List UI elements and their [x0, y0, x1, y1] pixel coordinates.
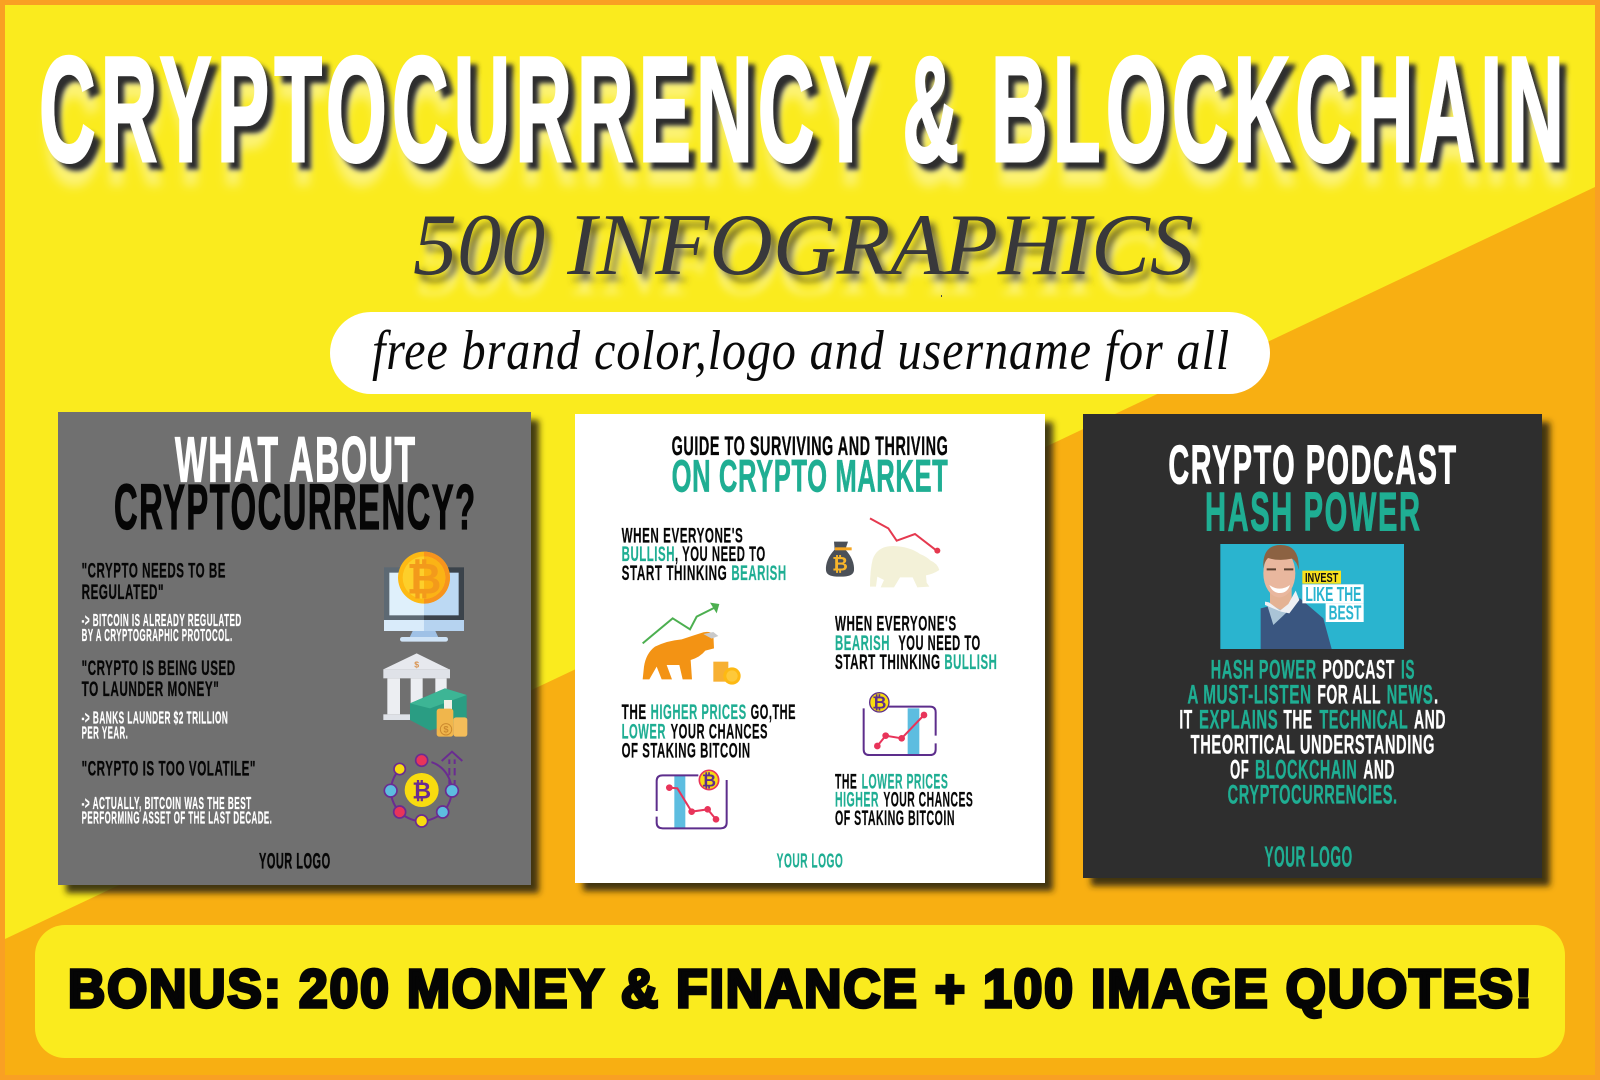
pill: free brand color	[330, 312, 1270, 394]
panel: guide to surviving: YOUR CHANCES	[883, 787, 973, 812]
text: podcast description: EXPLAINS	[1199, 704, 1278, 734]
text: lower prices: OF STAKING BITCOIN	[835, 805, 955, 830]
text: higher prices: THE	[622, 699, 647, 724]
image: podcast cover: INVEST	[1305, 570, 1338, 585]
text: lower prices: LOWER PRICES	[862, 769, 948, 794]
text: podcast description: HASH POWER	[1211, 654, 1317, 684]
text: regulated claim: "CRYPTO NEEDS TO BE	[82, 557, 226, 582]
text: podcast description: AND	[1363, 754, 1395, 784]
text: bearish advice: YOU NEED TO	[898, 630, 981, 655]
text: higher prices: LOWER	[622, 718, 666, 743]
text: bullish advice	[622, 522, 787, 585]
text: bullish advice: , YOU NEED TO	[675, 541, 766, 566]
heading: crypto podcast hash power	[1168, 433, 1458, 543]
text: lower prices: THE	[835, 769, 857, 794]
text: podcast description: IT	[1179, 704, 1193, 734]
icon: bear	[870, 546, 939, 587]
icon: rising chart	[864, 693, 936, 755]
text: lower prices: HIGHER	[835, 787, 879, 812]
icon: computer with bitcoin	[384, 552, 464, 642]
text: bearish advice	[835, 611, 997, 674]
text: podcast description: BLOCKCHAIN	[1255, 754, 1357, 784]
icon: falling line	[870, 518, 940, 554]
text: lower prices	[835, 769, 973, 830]
text: bearish advice: START THINKING	[835, 649, 941, 674]
text: bearish advice: WHEN EVERYONE'S	[835, 611, 957, 636]
text: laundering claim	[82, 655, 236, 742]
text: volatility claim: "CRYPTO IS TOO VOLATILE"	[82, 756, 256, 781]
text: higher prices: GO,THE	[751, 699, 796, 724]
banner: bonus: BONUS: 200 MONEY & FINANCE + 100 IMAGE QUOTES!	[68, 959, 1534, 1019]
text: podcast description: .	[1434, 679, 1439, 709]
heading: what about cryptocurrency	[114, 424, 477, 543]
banner: bonus	[35, 925, 1565, 1058]
text: podcast description: A MUST-LISTEN	[1187, 679, 1312, 709]
subtitle: 500 INFOGRAPHICS	[413, 197, 1194, 294]
image: podcast cover: BEST	[1329, 602, 1362, 625]
text: laundering claim: "CRYPTO IS BEING USED	[82, 655, 236, 680]
icon: falling chart: ₿	[702, 770, 716, 790]
text: podcast description: NEWS	[1387, 679, 1433, 709]
text: volatility claim: -> ACTUALLY, BITCOIN WAS THE BEST	[82, 793, 252, 813]
text: podcast description: OF	[1230, 754, 1249, 784]
panel: what about cryptocurrency: PERFORMING ASSET OF THE LAST DECADE.	[82, 807, 272, 827]
icon: bank with money: $	[414, 659, 419, 669]
icon: bank with money	[383, 653, 467, 737]
icon: money bag: ₿	[832, 555, 848, 576]
panel: what about cryptocurrency	[58, 412, 531, 885]
panel: what about cryptocurrency: -> BANKS LAUNDER $2 TRILLION	[82, 707, 228, 727]
text: bullish advice: BULLISH	[622, 541, 675, 566]
text: higher prices	[622, 699, 796, 763]
icon: rising chart: ₿	[872, 693, 886, 713]
text: podcast description: IS	[1401, 654, 1415, 684]
text: bullish advice: BEARISH	[731, 560, 787, 585]
icon: money bag	[826, 542, 854, 577]
panel: what about cryptocurrency: -> BITCOIN IS ALREADY REGULATED	[82, 610, 242, 630]
panel: what about cryptocurrency: BY A CRYPTOGRAPHIC PROTOCOL.	[82, 625, 233, 645]
text: bearish advice: BULLISH	[944, 649, 997, 674]
text: higher prices: YOUR CHANCES	[671, 718, 768, 743]
text: podcast description: CRYPTOCURRENCIES.	[1228, 779, 1398, 809]
text: podcast description: PODCAST	[1322, 654, 1395, 684]
text: higher prices: HIGHER PRICES	[651, 699, 747, 724]
heading: guide	[672, 431, 948, 502]
text: podcast description: AND	[1414, 704, 1446, 734]
heading: what about cryptocurrency: CRYPTOCURRENCY?	[114, 471, 477, 543]
text: laundering claim: TO LAUNDER MONEY"	[82, 676, 219, 701]
icon: bitcoin network: ₿	[412, 777, 431, 803]
text: regulated claim	[82, 557, 242, 645]
panel: guide to surviving	[575, 414, 1045, 883]
logo text: YOUR LOGO	[777, 851, 843, 873]
image: podcast cover: LIKE THE	[1305, 583, 1361, 606]
text: regulated claim: REGULATED"	[82, 579, 164, 604]
panel: crypto podcast: YOUR LOGO	[1264, 842, 1353, 874]
icon: bitcoin network	[382, 752, 462, 830]
text: podcast description: FOR ALL	[1317, 679, 1381, 709]
panel: crypto podcast	[1083, 414, 1542, 878]
pill: free brand color: free brand color,logo and username for all	[372, 320, 1230, 382]
text: volatility claim	[82, 756, 272, 827]
text: podcast description: TECHNICAL	[1319, 704, 1408, 734]
text: podcast description	[1179, 654, 1446, 809]
heading: what about cryptocurrency: WHAT ABOUT	[175, 424, 417, 496]
icon: bank with money: $	[443, 725, 449, 735]
text: bullish advice: WHEN EVERYONE'S	[622, 522, 743, 547]
text: laundering claim: PER YEAR.	[82, 722, 128, 742]
panel: what about cryptocurrency: YOUR LOGO	[259, 848, 331, 873]
image: podcast cover	[1220, 544, 1404, 649]
heading: guide: ON CRYPTO MARKET	[672, 451, 948, 502]
text: bearish advice: BEARISH	[835, 630, 890, 655]
icon: falling chart	[657, 770, 727, 828]
text: podcast description: THE	[1283, 704, 1313, 734]
icon: bull and rising line	[643, 603, 741, 685]
text: bullish advice: START THINKING	[622, 560, 727, 585]
heading: guide: GUIDE TO SURVIVING AND THRIVING	[672, 431, 948, 461]
text: higher prices: OF STAKING BITCOIN	[622, 738, 751, 763]
icon: computer with bitcoin: ₿	[407, 555, 441, 603]
